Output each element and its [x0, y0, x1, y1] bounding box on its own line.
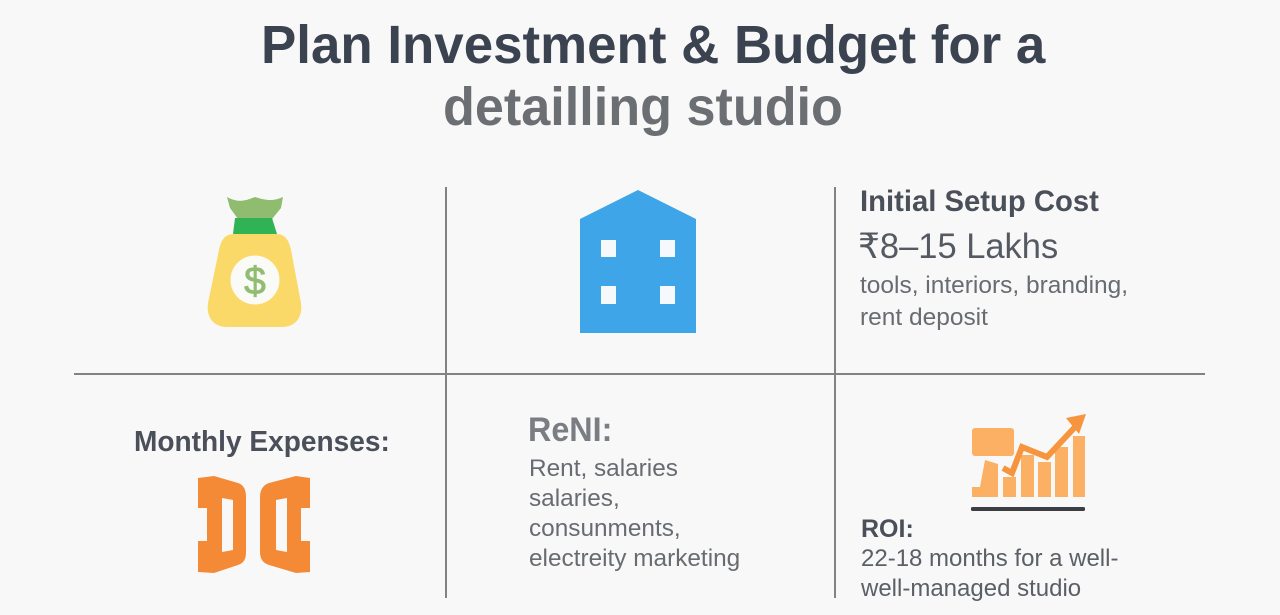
cost figure: ₹8–15 Lakhs — [858, 227, 1058, 266]
setup cost description: rent deposit — [860, 304, 988, 331]
icon: money bag: $ — [244, 260, 266, 303]
cost list — [529, 455, 740, 572]
ROI description — [861, 545, 1118, 602]
setup cost description: tools, interiors, branding, — [860, 272, 1128, 299]
cost list: electreity marketing — [529, 545, 740, 572]
ROI description: well-managed studio — [861, 575, 1081, 602]
ROI description: 22-18 months for a well- — [861, 545, 1118, 572]
heading: initial setup cost: Initial Setup Cost — [860, 185, 1099, 218]
panel: ROI — [861, 515, 1118, 602]
setup cost description — [860, 272, 1128, 331]
cost list: salaries, — [529, 485, 620, 512]
cost list: Rent, salaries — [529, 455, 678, 482]
title: Plan Investment & Budget for a — [261, 15, 1045, 75]
cost list: consunments, — [529, 515, 681, 542]
heading: ReNI: ReNI: — [528, 411, 612, 449]
subtitle: detailling studio — [443, 77, 843, 137]
panel: rent and costs — [528, 411, 740, 572]
heading: ROI: ROI: — [861, 515, 914, 543]
heading: monthly expenses: Monthly Expenses: — [134, 426, 390, 458]
panel: initial setup cost — [858, 185, 1128, 331]
